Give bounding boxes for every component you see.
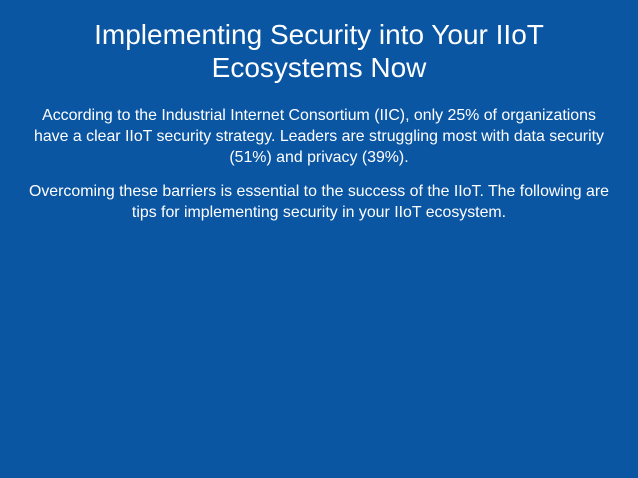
- text block: intro: have a clear IIoT security strategy. Leaders are struggling most with data security: [34, 128, 604, 145]
- text block: intro: tips for implementing security in your IIoT ecosystem.: [132, 204, 506, 221]
- text block: intro: [29, 107, 609, 221]
- title: Implementing Security into Your IIoT: [94, 19, 544, 50]
- text block: intro: Overcoming these barriers is essential to the success of the IIoT. The following are: [29, 183, 609, 200]
- text block: intro: According to the Industrial Internet Consortium (IIC), only 25% of organizations: [42, 107, 596, 124]
- title: [94, 19, 544, 83]
- text block: intro: (51%) and privacy (39%).: [229, 149, 409, 166]
- title: Ecosystems Now: [212, 52, 426, 83]
